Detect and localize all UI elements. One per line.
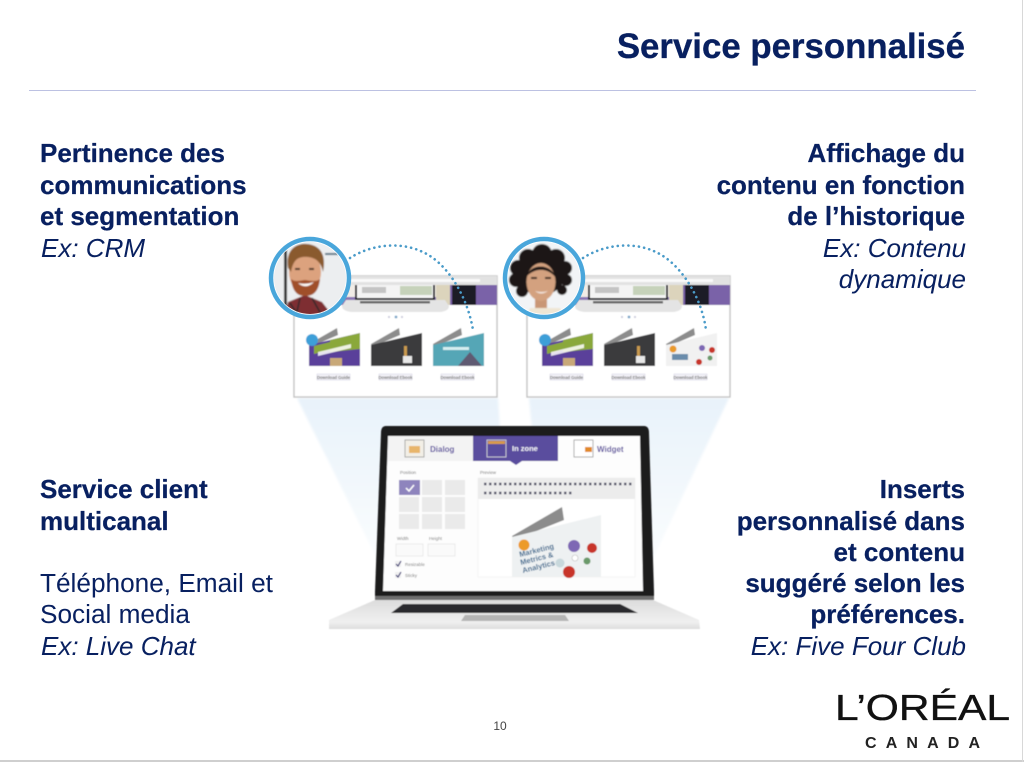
size fields and checkboxes: Width [397, 536, 409, 541]
preview pane [478, 470, 635, 577]
download buttons [317, 374, 474, 380]
text block: service client multicanal: Ex: Live Chat [41, 631, 197, 661]
browser window: user 1: Download Guide [317, 375, 351, 380]
text block: inserts personnalisés: Ex: Five Four Club [751, 631, 966, 661]
book in preview: Metrics & [519, 550, 555, 567]
dotted arc: user 2 [583, 245, 706, 330]
text block: affichage du contenu: de l’historique [787, 201, 965, 231]
browser window: user 2: Download Guide [550, 375, 584, 380]
book in preview [512, 507, 601, 578]
preview pane: Preview [480, 470, 497, 475]
position grid [399, 470, 465, 529]
text block: affichage du contenu: contenu en fonction [717, 170, 965, 200]
title: Service personnalisé [617, 27, 965, 66]
text block: inserts personnalisés: préférences. [810, 599, 965, 629]
logo: L'Oréal Canada [835, 687, 1010, 752]
book in preview: Marketing [518, 542, 555, 559]
text block: pertinence des communications: communications [40, 170, 247, 200]
position grid: Position [400, 470, 417, 475]
text block: affichage du contenu: dynamique [839, 264, 966, 294]
book covers [539, 328, 717, 366]
text block: inserts personnalisés [737, 474, 966, 661]
laptop [329, 426, 700, 629]
browser window: user 1 [294, 276, 497, 397]
tab bar: Dialog [430, 445, 455, 454]
size fields and checkboxes [395, 536, 455, 578]
tab bar [388, 436, 624, 465]
hero banner [573, 285, 730, 312]
dotted arc: user 1 [350, 245, 473, 330]
text block: service client multicanal: Téléphone, Email et [40, 568, 274, 598]
logo: L'Oréal Canada: CANADA [865, 735, 980, 752]
text block: inserts personnalisés: suggéré selon les [745, 568, 965, 598]
text block: inserts personnalisés: Inserts [880, 474, 965, 504]
logo: L'Oréal Canada: L’ORÉAL [835, 687, 1010, 728]
book covers [306, 328, 484, 366]
browser window: user 1: Download Ebook [441, 375, 475, 380]
browser window: user 2 [527, 276, 730, 397]
avatar: woman with curly hair [504, 239, 584, 320]
book in preview: Analytics [521, 558, 556, 575]
text block: affichage du contenu [717, 138, 966, 294]
laptop screen bezel [375, 426, 654, 600]
avatar: man with beard [270, 239, 350, 320]
text block: inserts personnalisés: personnalisé dans [737, 506, 965, 536]
browser window: user 2: Download Ebook [612, 375, 646, 380]
text block: affichage du contenu: Ex: Contenu [823, 233, 966, 263]
text block: service client multicanal: Service client [40, 474, 208, 504]
text block: pertinence des communications: et segmentation [40, 201, 239, 231]
text block: service client multicanal: Social media [40, 599, 190, 629]
tab bar: Widget [597, 445, 624, 454]
hero banner [340, 285, 497, 312]
text block: pertinence des communications [40, 138, 247, 263]
text block: affichage du contenu: Affichage du [808, 138, 965, 168]
text block: inserts personnalisés: et contenu [834, 537, 965, 567]
browser window: user 1: Download Ebook [379, 375, 413, 380]
browser window: user 2: Download Ebook [674, 375, 708, 380]
size fields and checkboxes: Resizable [405, 562, 425, 567]
size fields and checkboxes: Sticky [405, 573, 418, 578]
page number: 10 [493, 719, 507, 733]
text block: service client multicanal [40, 474, 274, 661]
download buttons [550, 374, 707, 380]
text block: pertinence des communications: Pertinence des [40, 138, 225, 168]
text block: pertinence des communications: Ex: CRM [41, 233, 145, 263]
light beams from windows to laptop [297, 398, 729, 565]
tab bar: In zone [512, 444, 538, 453]
laptop base [329, 600, 700, 629]
text block: service client multicanal: multicanal [40, 506, 169, 536]
size fields and checkboxes: Height [429, 536, 443, 541]
